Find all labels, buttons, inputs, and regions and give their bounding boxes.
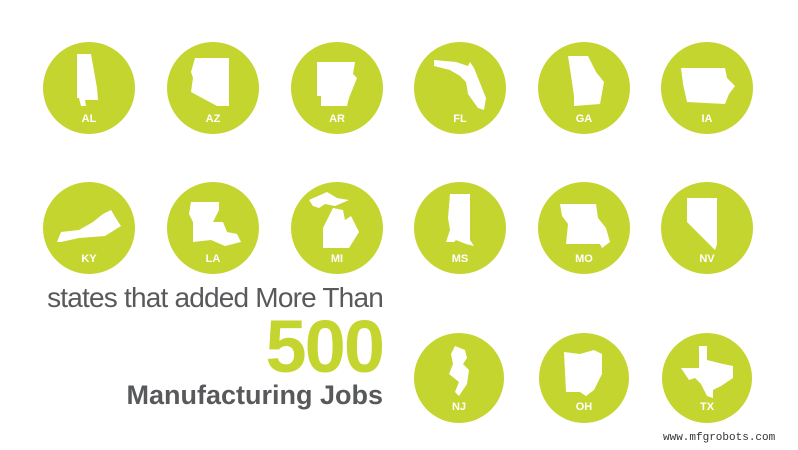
icon: AZ	[167, 42, 259, 134]
icon: LA	[167, 182, 259, 274]
icon: AL: AL	[82, 113, 97, 125]
icon: MO	[538, 182, 630, 274]
icon: OH: OH	[576, 401, 592, 413]
icon: NJ: NJ	[452, 401, 466, 413]
icon: OH	[539, 333, 629, 423]
text: states that added More Than: states that added More Than	[47, 282, 383, 313]
icon: IA: IA	[702, 113, 713, 125]
icon: FL	[414, 42, 506, 134]
icon: GA	[538, 42, 630, 134]
icon: MS: MS	[452, 253, 468, 265]
icon: GA: GA	[576, 113, 592, 125]
watermark: www.mfgrobots.com	[663, 432, 775, 444]
icon: IA	[661, 42, 753, 134]
icon: KY	[43, 182, 135, 274]
icon: AR: AR	[329, 113, 345, 125]
icon: FL: FL	[453, 113, 467, 125]
icon: MI	[291, 182, 383, 274]
icon: MS	[414, 182, 506, 274]
icon: LA: LA	[206, 253, 220, 265]
icon: AR	[291, 42, 383, 134]
icon: AL	[43, 42, 135, 134]
icon: MO: MO	[575, 253, 593, 265]
icon: NV	[661, 182, 753, 274]
icon: TX: TX	[700, 401, 715, 413]
text: 500: 500	[266, 305, 383, 388]
icon: MI: MI	[331, 253, 343, 265]
icon: NV: NV	[699, 253, 715, 265]
icon: NJ	[414, 333, 504, 423]
icon: AZ: AZ	[206, 113, 221, 125]
text: Manufacturing Jobs: Manufacturing Jobs	[126, 380, 383, 410]
icon: TX	[662, 333, 752, 423]
icon: KY: KY	[81, 253, 97, 265]
